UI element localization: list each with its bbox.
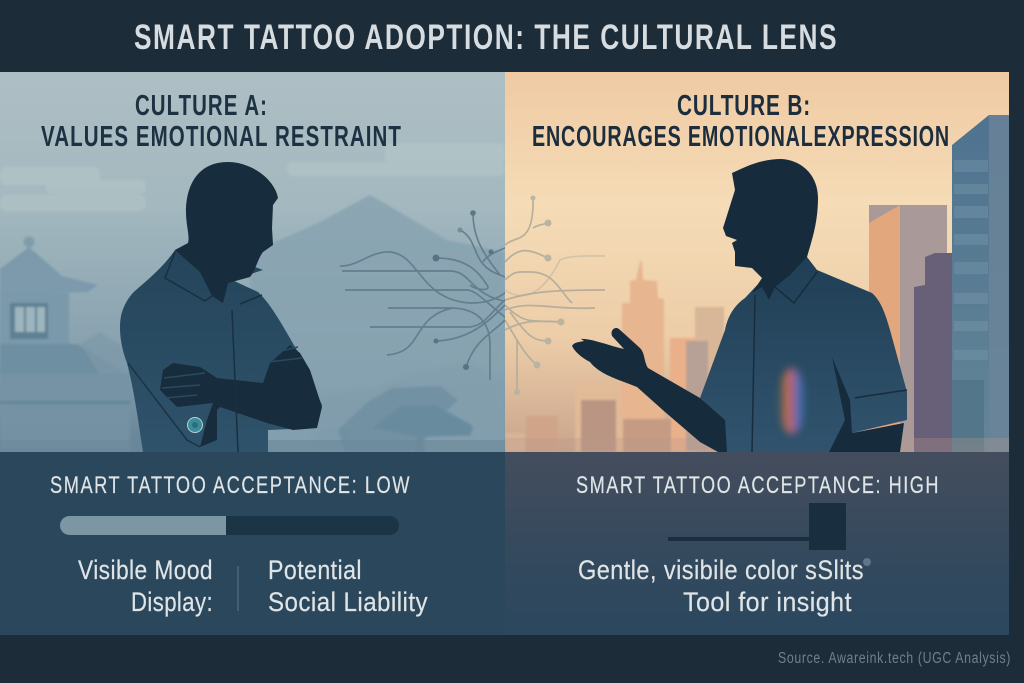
text: visible mood display: Visible Mood: [78, 555, 213, 585]
purple tower: [914, 253, 952, 452]
heading: culture A: [41, 90, 402, 153]
text: visible mood display: Display:: [131, 587, 213, 617]
panel: culture B scene: [505, 72, 1009, 452]
graphic: neural network crossing the divide (cool half): [340, 210, 505, 380]
heading: culture A: VALUES EMOTIONAL RESTRAINT: [41, 121, 402, 153]
mountain: [250, 195, 505, 452]
misty hills: [310, 362, 505, 452]
text: gentle visible color shifts: Tool for insight: [683, 587, 852, 617]
text: potential social liability: Potential: [268, 555, 362, 585]
panel: culture A acceptance: [0, 452, 505, 635]
figure: expressive man gesturing: [572, 159, 907, 452]
distant skyline: [505, 260, 724, 452]
pagoda: [0, 236, 130, 452]
icon: smart tattoo dot: [188, 418, 202, 432]
text: visible mood display: [78, 555, 213, 617]
meter: high acceptance slider: [668, 503, 846, 550]
heading: culture B: [532, 90, 950, 153]
label: acceptance low: SMART TATTOO ACCEPTANCE: LOW: [50, 472, 411, 499]
text: gentle visible color shifts: Gentle, visibile color sSlits: [578, 555, 864, 585]
icon: iridescent smart tattoo glow: [779, 368, 805, 434]
graphic: neural network crossing the divide (warm half): [505, 196, 605, 395]
panel: culture A scene: [0, 72, 505, 452]
bonsai tree: [338, 386, 474, 452]
heading: culture B: CULTURE B:: [677, 90, 811, 122]
icon: small dot: [863, 558, 871, 566]
mid-distance tower: [869, 205, 947, 452]
meter: low acceptance: [60, 516, 399, 535]
blue tower: [952, 115, 1009, 452]
figure: restrained man with crossed arms: [120, 162, 322, 452]
panel: culture B acceptance: [505, 452, 1009, 635]
heading: culture A: CULTURE A:: [135, 90, 268, 122]
text: gentle visible color shifts: [578, 555, 864, 617]
text: potential social liability: Social Liability: [268, 587, 428, 617]
text: potential social liability: [268, 555, 428, 617]
divider: [238, 566, 239, 611]
